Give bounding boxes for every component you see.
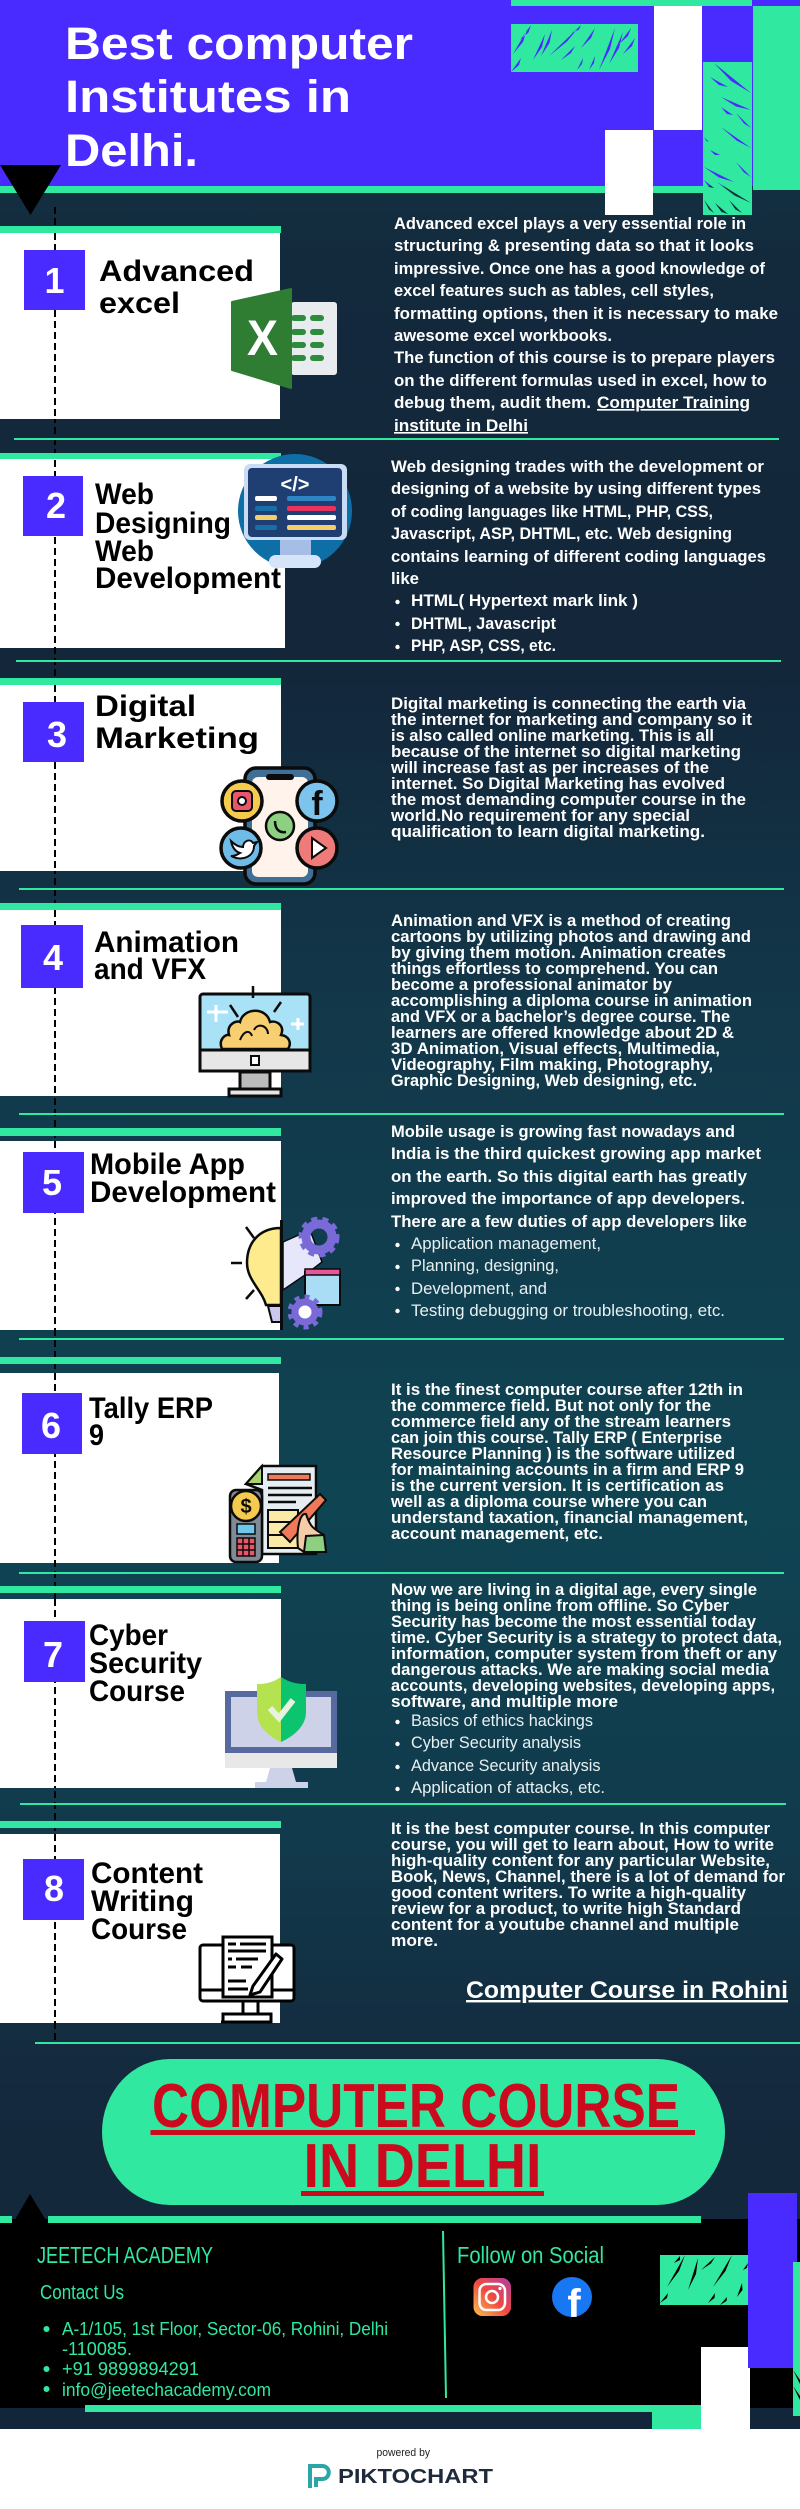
footer white area bbox=[0, 2429, 800, 2509]
description: It is the best computer course. In this computer bbox=[391, 1820, 771, 1838]
description: world.No requirement for any special bbox=[390, 807, 690, 825]
description: DHTML, Javascript bbox=[411, 615, 556, 633]
icon: instagram bbox=[474, 2278, 511, 2316]
course heading: Marketing bbox=[95, 722, 259, 755]
panel: 1 advanced excel bbox=[0, 215, 778, 435]
description: The function of this course is to prepare players bbox=[394, 349, 775, 367]
description: Security has become the most essential today bbox=[391, 1613, 757, 1631]
number badge: 3 bbox=[47, 714, 67, 755]
description: PHP, ASP, CSS, etc. bbox=[411, 637, 556, 655]
description: Mobile usage is growing fast nowadays and bbox=[391, 1123, 735, 1141]
description: course, you will get to learn about, How to write bbox=[391, 1836, 774, 1854]
description bbox=[391, 1820, 786, 1950]
description: is also called online marketing. This is all bbox=[391, 727, 714, 745]
number badge: 8 bbox=[44, 1868, 64, 1909]
powered by piktochart: PIKTOCHART bbox=[338, 2466, 493, 2488]
course heading bbox=[89, 1392, 213, 1452]
description: the commerce field. But not only for the bbox=[391, 1397, 711, 1415]
description bbox=[390, 695, 753, 841]
panel: 8 content writing bbox=[0, 1820, 788, 2023]
icon: social media phone: f bbox=[311, 785, 323, 823]
course heading bbox=[89, 1619, 202, 1708]
description: debug them, audit them. bbox=[394, 394, 591, 412]
icon: excel bbox=[232, 289, 337, 388]
description bbox=[391, 458, 766, 655]
icon: social media phone bbox=[221, 768, 337, 884]
description: for maintaining accounts in a firm and ERP 9 bbox=[391, 1461, 744, 1479]
course heading: Digital bbox=[95, 690, 196, 723]
course heading: Content bbox=[91, 1857, 203, 1890]
description: Basics of ethics hackings bbox=[411, 1712, 593, 1730]
course heading bbox=[91, 1857, 203, 1946]
course heading: Course bbox=[89, 1675, 185, 1708]
panel: 7 cyber security bbox=[0, 1581, 782, 1797]
callout: computer course in delhi: COMPUTER COURSE bbox=[152, 2072, 680, 2141]
description: software, and multiple more bbox=[391, 1693, 618, 1711]
description: It is the finest computer course after 12th in bbox=[391, 1381, 743, 1399]
number badge bbox=[24, 250, 85, 310]
course heading bbox=[90, 1148, 276, 1209]
description: Now we are living in a digital age, every single bbox=[391, 1581, 757, 1599]
course heading: Security bbox=[89, 1647, 202, 1680]
description: Graphic Designing, Web designing, etc. bbox=[391, 1072, 697, 1090]
description: and VFX or a bachelor’s degree course. The bbox=[391, 1008, 730, 1026]
icon: web code monitor: </> bbox=[281, 474, 309, 496]
description: formatting options, then it is necessary to make bbox=[394, 305, 778, 323]
icon: facebook bbox=[552, 2277, 592, 2326]
description: accounts, developing websites, developing apps, bbox=[391, 1677, 775, 1695]
number badge: 5 bbox=[42, 1162, 62, 1203]
course heading: Advanced bbox=[99, 255, 254, 288]
description: qualification to learn digital marketing. bbox=[391, 823, 705, 841]
number badge bbox=[24, 1621, 85, 1682]
description: excel features such as tables, cell styles, bbox=[394, 282, 714, 300]
description: commerce field any of the stream learners bbox=[391, 1413, 731, 1431]
description: There are a few duties of app developers like bbox=[391, 1213, 747, 1231]
course heading: excel bbox=[99, 287, 180, 320]
number badge bbox=[22, 1393, 82, 1454]
description bbox=[391, 1581, 782, 1797]
panel: 5 mobile app development bbox=[0, 1123, 762, 1330]
description: Computer Training bbox=[597, 394, 750, 412]
number badge bbox=[23, 476, 83, 536]
description: Cyber Security analysis bbox=[411, 1734, 581, 1752]
description: designing of a website by using different types bbox=[391, 480, 761, 498]
description: understand taxation, financial management, bbox=[391, 1509, 748, 1527]
contact heading: Contact Us bbox=[40, 2282, 124, 2304]
course heading: 9 bbox=[89, 1419, 104, 1452]
course heading: Designing bbox=[95, 507, 231, 540]
course heading: Web bbox=[95, 478, 154, 511]
number badge: 4 bbox=[43, 937, 63, 978]
description: on the earth. So this digital earth has greatly bbox=[391, 1168, 748, 1186]
contact list: A-1/105, 1st Floor, Sector-06, Rohini, Delhi bbox=[62, 2318, 388, 2339]
description: Web designing trades with the development or bbox=[391, 458, 765, 476]
description: accomplishing a diploma course in animation bbox=[391, 992, 752, 1010]
course heading: Web bbox=[95, 535, 154, 568]
description: contains learning of different coding languages bbox=[391, 548, 766, 566]
title bbox=[65, 18, 413, 176]
description: cartoons by utilizing photos and drawing and bbox=[391, 928, 751, 946]
description: Development, and bbox=[411, 1280, 547, 1298]
callout: computer course in delhi: IN DELHI bbox=[304, 2132, 542, 2201]
description: like bbox=[391, 570, 419, 588]
panel: 3 digital marketing bbox=[0, 678, 753, 884]
description: Advance Security analysis bbox=[411, 1757, 600, 1775]
contact list: +91 9899894291 bbox=[62, 2358, 199, 2379]
description: become a professional animator by bbox=[391, 976, 673, 994]
course heading: Development bbox=[90, 1176, 276, 1209]
panel: 6 tally erp bbox=[0, 1357, 748, 1563]
panel: 4 animation and vfx bbox=[0, 903, 752, 1096]
description: thing is being online from offline. So Cyber bbox=[391, 1597, 730, 1615]
description: more. bbox=[391, 1932, 438, 1950]
description: Resource Planning ) is the software utilized bbox=[391, 1445, 735, 1463]
title: Best computer bbox=[65, 18, 413, 69]
course heading bbox=[95, 478, 281, 595]
course heading bbox=[95, 690, 259, 755]
panel: 2 web designing bbox=[0, 453, 766, 655]
description: Advanced excel plays a very essential role in bbox=[394, 215, 746, 233]
description: Javascript, ASP, DHTML, etc. Web designing bbox=[391, 525, 732, 543]
number badge bbox=[23, 1152, 84, 1213]
number badge bbox=[23, 702, 84, 762]
number badge: 2 bbox=[46, 485, 66, 526]
icon: piktochart logo bbox=[310, 2466, 329, 2488]
icon: excel: X bbox=[247, 310, 278, 366]
icon: shield monitor bbox=[225, 1677, 337, 1788]
icon: web code monitor bbox=[238, 454, 352, 568]
contact list bbox=[44, 2318, 388, 2400]
description: Application management, bbox=[411, 1235, 601, 1253]
description: is the current version. It is certification as bbox=[391, 1477, 724, 1495]
description bbox=[390, 1381, 748, 1543]
icon: accounting bbox=[230, 1466, 326, 1562]
description: of coding languages like HTML, PHP, CSS, bbox=[391, 503, 713, 521]
description bbox=[394, 215, 778, 435]
description: Application of attacks, etc. bbox=[411, 1779, 605, 1797]
description: dangerous attacks. We are making social media bbox=[391, 1661, 770, 1679]
course heading bbox=[99, 255, 254, 320]
description: the internet for marketing and company so it bbox=[391, 711, 753, 729]
powered by piktochart bbox=[310, 2447, 493, 2488]
description: India is the third quickest growing app market bbox=[391, 1145, 762, 1163]
icon: app idea bulb and gears bbox=[231, 1219, 340, 1330]
panel: footer contact bbox=[0, 2193, 800, 2429]
description: high-quality content for any particular Website, bbox=[391, 1852, 770, 1870]
academy name: JEETECH ACADEMY bbox=[37, 2242, 213, 2268]
number badge: 7 bbox=[43, 1634, 63, 1675]
course heading: Cyber bbox=[89, 1619, 168, 1652]
callout: computer course in delhi bbox=[102, 2059, 725, 2205]
number badge: 6 bbox=[41, 1405, 61, 1446]
description: improved the importance of app developers. bbox=[391, 1190, 745, 1208]
description: account management, etc. bbox=[391, 1525, 603, 1543]
timeline start triangle bbox=[0, 165, 61, 215]
description: well as a diploma course where you can bbox=[390, 1493, 707, 1511]
course heading: Tally ERP bbox=[89, 1392, 213, 1425]
description: Videography, Film making, Photography, bbox=[391, 1056, 713, 1074]
course heading: Mobile App bbox=[90, 1148, 245, 1181]
description: impressive. Once one has a good knowledge of bbox=[394, 260, 765, 278]
description: internet. So Digital Marketing has evolved bbox=[391, 775, 725, 793]
description: on the different formulas used in excel, how to bbox=[394, 372, 767, 390]
course heading: Animation bbox=[94, 926, 239, 959]
course heading: Development bbox=[95, 562, 281, 595]
description: 3D Animation, Visual effects, Multimedia, bbox=[391, 1040, 720, 1058]
number badge bbox=[21, 925, 83, 988]
title: Delhi. bbox=[65, 125, 198, 176]
course heading: Course bbox=[91, 1913, 187, 1946]
description: institute in Delhi bbox=[394, 417, 528, 435]
description: Testing debugging or troubleshooting, etc. bbox=[411, 1302, 725, 1320]
social heading: Follow on Social bbox=[457, 2242, 604, 2268]
description: things effortless to comprehend. You can bbox=[391, 960, 718, 978]
description: Animation and VFX is a method of creating bbox=[391, 912, 731, 930]
description: information, computer system from theft or any bbox=[391, 1645, 778, 1663]
icon: facebook: f bbox=[567, 2282, 581, 2326]
description: review for a product, to write high Standard bbox=[391, 1900, 741, 1918]
description: can join this course. Tally ERP ( Enterprise bbox=[391, 1429, 722, 1447]
description: because of the internet so digital marketing bbox=[391, 743, 741, 761]
description: learners are offered knowledge about 2D & bbox=[391, 1024, 734, 1042]
description: by giving them motion. Animation creates bbox=[391, 944, 726, 962]
icon: accounting: $ bbox=[240, 1496, 252, 1518]
description: good content writers. To write a high-quality bbox=[391, 1884, 747, 1902]
description bbox=[391, 912, 752, 1090]
description: will increase fast as per increases of the bbox=[390, 759, 709, 777]
link: computer course in rohini: Computer Course in Rohini bbox=[466, 1977, 788, 2004]
timeline dashed line bbox=[54, 207, 56, 2040]
description: the most demanding computer course in the bbox=[391, 791, 746, 809]
icon: writing monitor bbox=[200, 1937, 294, 2022]
description: content for a youtube channel and multiple bbox=[391, 1916, 739, 1934]
number badge bbox=[23, 1859, 84, 1920]
number badge: 1 bbox=[44, 260, 65, 301]
description: Planning, designing, bbox=[411, 1257, 559, 1275]
description bbox=[391, 1123, 762, 1320]
contact list: info@jeetechacademy.com bbox=[62, 2379, 271, 2400]
description: awesome excel workbooks. bbox=[394, 327, 612, 345]
description: time. Cyber Security is a strategy to protect data, bbox=[391, 1629, 782, 1647]
powered by piktochart: powered by bbox=[376, 2447, 430, 2459]
course heading: Writing bbox=[91, 1885, 194, 1918]
description: HTML( Hypertext mark link ) bbox=[411, 592, 638, 610]
course heading: and VFX bbox=[94, 953, 206, 986]
description: structuring & presenting data so that it looks bbox=[394, 237, 754, 255]
icon: animation monitor bbox=[200, 986, 310, 1096]
description: Digital marketing is connecting the earth via bbox=[391, 695, 747, 713]
description: Book, News, Channel, there is a lot of demand for bbox=[391, 1868, 786, 1886]
header bbox=[0, 0, 800, 215]
title: Institutes in bbox=[65, 71, 351, 122]
contact list: -110085. bbox=[62, 2338, 132, 2359]
course heading bbox=[94, 926, 239, 986]
